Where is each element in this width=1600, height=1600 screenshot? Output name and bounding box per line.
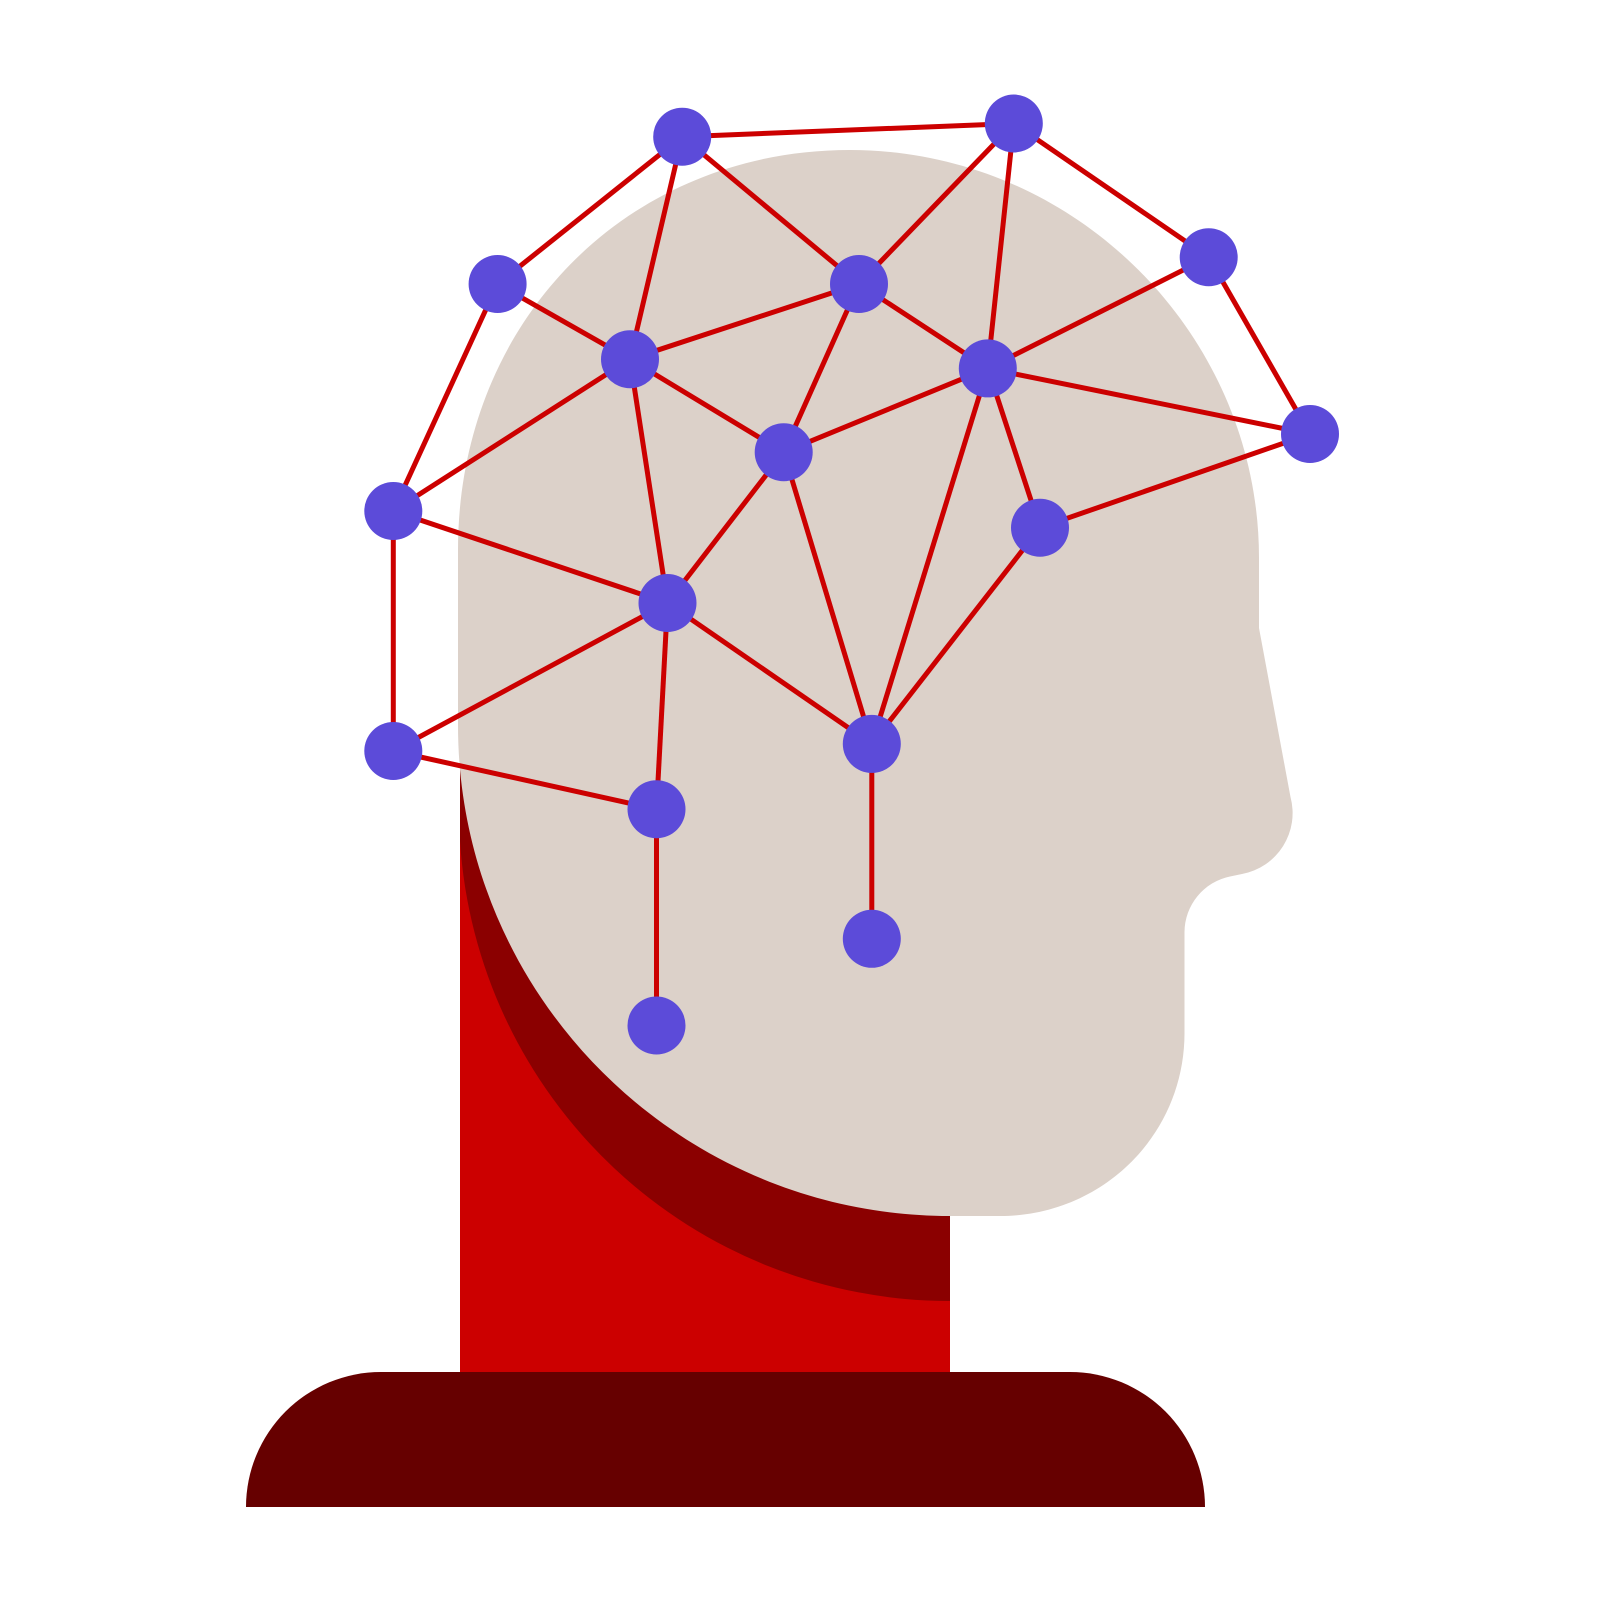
node bbox=[469, 255, 527, 313]
node bbox=[1011, 499, 1069, 557]
node bbox=[843, 910, 901, 968]
node bbox=[628, 780, 686, 838]
shoulders base bbox=[246, 1372, 1205, 1507]
node bbox=[601, 330, 659, 388]
node bbox=[959, 339, 1017, 397]
node bbox=[364, 722, 422, 780]
node bbox=[628, 996, 686, 1054]
node bbox=[638, 574, 696, 632]
node bbox=[830, 255, 888, 313]
head silhouette bbox=[458, 150, 1293, 1216]
node bbox=[364, 482, 422, 540]
node bbox=[1281, 405, 1339, 463]
neck bbox=[460, 760, 950, 1380]
network connections bbox=[393, 124, 1310, 1026]
neck shadow bbox=[460, 765, 950, 1301]
node bbox=[843, 715, 901, 773]
node bbox=[1180, 228, 1238, 286]
network nodes bbox=[364, 94, 1339, 1054]
node bbox=[985, 94, 1043, 152]
node bbox=[755, 423, 813, 481]
node bbox=[653, 108, 711, 166]
